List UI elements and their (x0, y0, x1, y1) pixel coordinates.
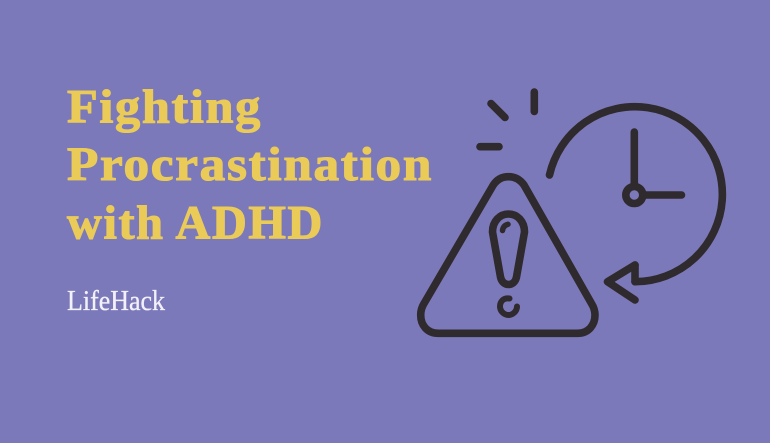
icon: warning triangle (421, 177, 595, 333)
title: Procrastination (67, 138, 433, 191)
icon: warning triangle with clock (421, 92, 722, 333)
icon: exclamation mark (492, 214, 524, 315)
icon: clock hands (626, 132, 682, 204)
title (67, 80, 433, 249)
icon: clock arc with arrow (550, 107, 722, 300)
icon: alert spark lines (480, 92, 534, 147)
title: Fighting (67, 80, 262, 133)
title: with ADHD (67, 196, 324, 249)
logo: LifeHack: LifeHack (67, 286, 166, 317)
